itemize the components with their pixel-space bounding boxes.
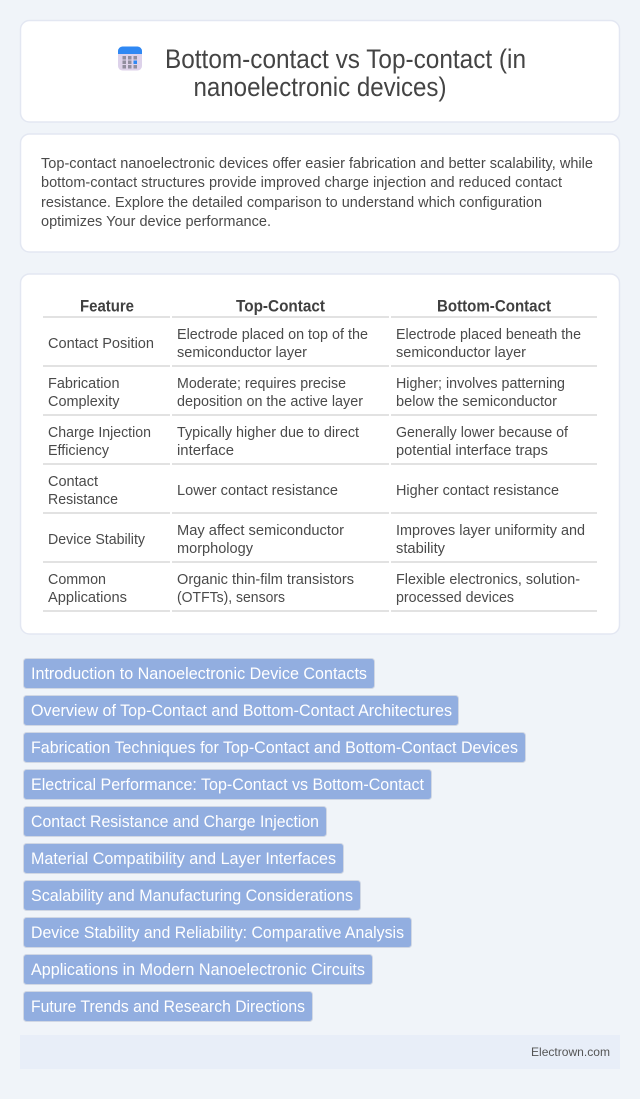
- row: common applications: Flexible electronics, solution-: [396, 572, 580, 588]
- link: electrical performance: Electrical Performance: Top-Contact vs Bottom-Contact: [31, 776, 424, 794]
- row: fabrication complexity: Fabrication: [48, 376, 120, 392]
- row: contact resistance: Contact: [48, 474, 98, 490]
- row: common applications: processed devices: [396, 590, 514, 606]
- link: scalability: [24, 880, 360, 910]
- row: device stability: [48, 523, 585, 557]
- link: stability: [24, 918, 412, 948]
- table header: Top-Contact: [236, 298, 325, 316]
- row: device stability: stability: [396, 541, 446, 557]
- link: material compatibility: [24, 844, 344, 874]
- link: applications: [24, 954, 372, 984]
- row: charge injection efficiency: Charge Injection: [48, 425, 151, 441]
- title: [165, 44, 526, 102]
- link: overview: Overview of Top-Contact and Bottom-Contact Architectures: [31, 702, 452, 720]
- link: material compatibility: Material Compatibility and Layer Interfaces: [31, 850, 336, 868]
- section links list: [24, 658, 526, 1022]
- row: common applications: (OTFTs), sensors: [177, 590, 285, 606]
- link: scalability: Scalability and Manufacturing Considerations: [31, 887, 353, 905]
- text block: summary paragraph: Top-contact nanoelectronic devices offer easier fabrication and better scalability, while: [41, 156, 593, 172]
- link: fabrication: Fabrication Techniques for Top-Contact and Bottom-Contact Devices: [31, 739, 518, 757]
- row: contact position: semiconductor layer: [396, 345, 526, 361]
- row: contact position: [48, 327, 581, 361]
- row: charge injection efficiency: Efficiency: [48, 443, 110, 459]
- icon: calendar: [118, 46, 142, 70]
- text block: summary paragraph: resistance. Explore the detailed comparison to understand which configuration: [41, 195, 542, 211]
- row: common applications: [48, 572, 580, 606]
- row: common applications: Common: [48, 572, 106, 588]
- title: Bottom-contact vs Top-contact (in: [165, 44, 526, 74]
- link: future trends: [24, 992, 312, 1022]
- panel: comparison table: [20, 274, 620, 634]
- row: fabrication complexity: Higher; involves patterning: [396, 376, 565, 392]
- row: contact position: Contact Position: [48, 336, 154, 352]
- row: common applications: Organic thin-film transistors: [177, 572, 354, 588]
- row: charge injection efficiency: potential interface traps: [396, 443, 548, 459]
- row: fabrication complexity: Complexity: [48, 394, 120, 410]
- panel: title card: [20, 20, 620, 122]
- row: fabrication complexity: below the semiconductor: [396, 394, 557, 410]
- link: overview: [24, 696, 458, 726]
- row: contact resistance: [48, 474, 559, 508]
- row: charge injection efficiency: Typically higher due to direct: [177, 425, 359, 441]
- row: device stability: Improves layer uniformity and: [396, 523, 585, 539]
- row: contact position: Electrode placed beneath the: [396, 327, 581, 343]
- footer: Electrown.com: [531, 1045, 610, 1059]
- text block: summary paragraph: optimizes Your device performance.: [41, 214, 271, 230]
- table header: Feature: [80, 298, 134, 316]
- row: fabrication complexity: Moderate; requires precise: [177, 376, 346, 392]
- row: contact position: semiconductor layer: [177, 345, 307, 361]
- row: fabrication complexity: deposition on the active layer: [177, 394, 363, 410]
- link: electrical performance: [24, 770, 432, 800]
- link: introduction: Introduction to Nanoelectronic Device Contacts: [31, 665, 367, 683]
- row: device stability: May affect semiconductor: [177, 523, 344, 539]
- footer: [20, 1035, 620, 1069]
- row: device stability: Device Stability: [48, 532, 146, 548]
- link: introduction: [24, 658, 374, 688]
- panel: summary: [20, 134, 620, 252]
- row: charge injection efficiency: interface: [177, 443, 234, 459]
- text block: summary paragraph: [41, 156, 593, 230]
- text block: summary paragraph: bottom-contact structures provide improved charge injection and reduced contact: [41, 175, 562, 191]
- title: nanoelectronic devices): [194, 72, 446, 102]
- row: contact resistance: Resistance: [48, 492, 118, 508]
- row: contact resistance: Higher contact resistance: [396, 483, 559, 499]
- row: charge injection efficiency: Generally lower because of: [396, 425, 569, 441]
- row: contact position: Electrode placed on top of the: [177, 327, 368, 343]
- link: contact resistance: [24, 806, 326, 836]
- link: contact resistance: Contact Resistance and Charge Injection: [31, 813, 319, 831]
- table header: [80, 298, 551, 316]
- row: device stability: morphology: [177, 541, 254, 557]
- row: common applications: Applications: [48, 590, 127, 606]
- link: future trends: Future Trends and Research Directions: [31, 998, 305, 1016]
- link: stability: Device Stability and Reliability: Comparative Analysis: [31, 924, 404, 942]
- link: applications: Applications in Modern Nanoelectronic Circuits: [31, 961, 365, 979]
- table header: Bottom-Contact: [437, 298, 551, 316]
- row: fabrication complexity: [48, 376, 565, 410]
- link: fabrication: [24, 732, 526, 762]
- row: charge injection efficiency: [48, 425, 569, 459]
- row: contact resistance: Lower contact resistance: [177, 483, 338, 499]
